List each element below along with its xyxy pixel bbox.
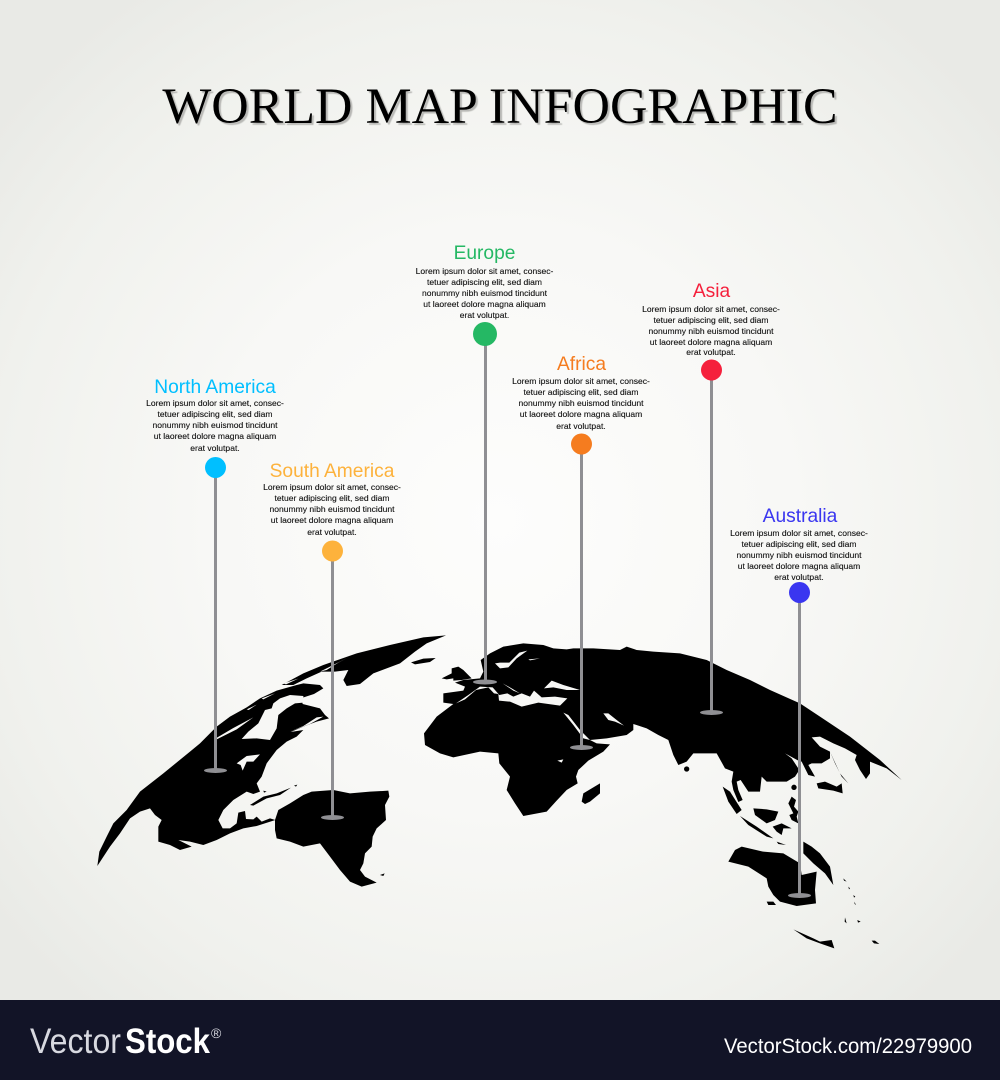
text block: North America: ut laoreet dolore magna aliquam bbox=[154, 431, 276, 441]
text block: Australia: ut laoreet dolore magna aliquam bbox=[738, 561, 860, 571]
text block: Europe: nonummy nibh euismod tincidunt bbox=[422, 288, 548, 298]
Lake Victoria bbox=[557, 759, 563, 763]
logo: VectorStock: ® bbox=[211, 1025, 222, 1041]
Great Lakes bbox=[237, 754, 260, 771]
heading: Europe: Europe bbox=[454, 243, 515, 264]
Sri Lanka bbox=[684, 766, 689, 772]
Gulf of St Lawrence bbox=[290, 717, 323, 732]
small Pacific islands bbox=[843, 878, 879, 944]
panel: South America bbox=[263, 461, 401, 820]
Philippines bbox=[788, 797, 798, 823]
Borneo bbox=[753, 808, 778, 823]
pin: Australia bbox=[788, 582, 811, 898]
text block: Europe: tetuer adipiscing elit, sed diam bbox=[427, 277, 542, 287]
text block: South America: Lorem ipsum dolor sit amet, consec- bbox=[263, 482, 401, 492]
South America bbox=[275, 790, 389, 887]
Greenland bbox=[282, 635, 446, 686]
New Zealand bbox=[793, 929, 834, 948]
text block: South America: ut laoreet dolore magna aliquam bbox=[271, 515, 393, 525]
Eurasia and Africa bbox=[424, 643, 902, 816]
Adriatic bbox=[503, 683, 520, 693]
North America and Arctic bbox=[97, 683, 329, 866]
pin: Asia bbox=[700, 360, 723, 715]
pin: Africa bbox=[570, 434, 593, 750]
title: WORLD MAP INFOGRAPHIC bbox=[162, 79, 838, 135]
text block: Asia: nonummy nibh euismod tincidunt bbox=[649, 326, 774, 336]
heading: South America: South America bbox=[270, 461, 395, 482]
image id: VectorStock.com/22979900 bbox=[724, 1035, 972, 1058]
text block: Australia: erat volutpat. bbox=[774, 572, 824, 582]
Madagascar bbox=[582, 783, 600, 804]
text block: South America: nonummy nibh euismod tincidunt bbox=[270, 504, 395, 514]
heading: North America: North America bbox=[154, 377, 276, 398]
Japan bbox=[817, 782, 843, 793]
Sakhalin bbox=[830, 752, 848, 783]
Hudson Bay bbox=[242, 695, 303, 740]
Great Britain and Ireland bbox=[442, 667, 472, 681]
logo: VectorStock bbox=[30, 1022, 222, 1061]
text block: South America: tetuer adipiscing elit, sed diam bbox=[275, 493, 389, 503]
Tasmania bbox=[767, 902, 776, 905]
map: bays of the Americas bbox=[214, 657, 348, 771]
heading: Asia: Asia bbox=[693, 281, 730, 302]
Iceland bbox=[411, 658, 436, 664]
logo: VectorStock: Stock bbox=[125, 1022, 210, 1061]
heading: Africa: Africa bbox=[557, 354, 606, 375]
Baltic bbox=[495, 651, 527, 668]
Persian Gulf bbox=[603, 713, 624, 726]
map: Americas bbox=[97, 635, 446, 887]
panel: Europe bbox=[416, 243, 554, 684]
footer bar bbox=[0, 1000, 1000, 1080]
text block: Africa: ut laoreet dolore magna aliquam bbox=[520, 409, 642, 419]
pin: North America bbox=[204, 457, 227, 773]
world map bbox=[97, 635, 902, 948]
text block: Europe: erat volutpat. bbox=[460, 310, 509, 320]
Mediterranean bbox=[456, 687, 567, 707]
text block: Asia: erat volutpat. bbox=[686, 347, 736, 357]
panel: Asia bbox=[642, 281, 780, 715]
text block: Asia: tetuer adipiscing elit, sed diam bbox=[654, 315, 768, 325]
text block: Europe: Lorem ipsum dolor sit amet, consec- bbox=[416, 266, 554, 276]
text block: Australia: tetuer adipiscing elit, sed diam bbox=[742, 539, 856, 549]
panel: North America bbox=[146, 377, 284, 773]
text block: South America: erat volutpat. bbox=[307, 527, 357, 537]
panel: Australia bbox=[730, 506, 868, 898]
text block: Africa: nonummy nibh euismod tincidunt bbox=[519, 398, 644, 408]
pin: South America bbox=[321, 540, 344, 820]
Sumatra bbox=[723, 787, 742, 814]
panel: Africa bbox=[512, 354, 650, 750]
Taiwan bbox=[791, 785, 797, 790]
Arctic channels bbox=[214, 717, 253, 739]
text block: North America: erat volutpat. bbox=[190, 443, 240, 453]
text block: Africa: Lorem ipsum dolor sit amet, consec- bbox=[512, 376, 650, 386]
map: Eurasia, Africa and Oceania bbox=[424, 643, 902, 948]
logo: VectorStock: Vector bbox=[30, 1022, 121, 1061]
Australia bbox=[728, 847, 817, 906]
map: inland seas of Eurasia and Africa bbox=[456, 651, 624, 763]
Black Sea bbox=[544, 681, 580, 690]
text block: Australia: Lorem ipsum dolor sit amet, consec- bbox=[730, 528, 868, 538]
text block: Asia: ut laoreet dolore magna aliquam bbox=[650, 337, 772, 347]
Sulawesi bbox=[773, 823, 792, 835]
text block: Australia: nonummy nibh euismod tincidunt bbox=[737, 550, 862, 560]
heading: Australia: Australia bbox=[763, 506, 838, 527]
text block: North America: Lorem ipsum dolor sit amet, consec- bbox=[146, 398, 284, 408]
Red Sea bbox=[563, 713, 590, 740]
text block: Asia: Lorem ipsum dolor sit amet, consec- bbox=[642, 304, 780, 314]
New Guinea bbox=[803, 842, 833, 885]
Java and lesser islands bbox=[740, 816, 786, 845]
text block: North America: tetuer adipiscing elit, sed diam bbox=[158, 409, 272, 419]
text block: Europe: ut laoreet dolore magna aliquam bbox=[423, 299, 546, 309]
Caribbean islands bbox=[250, 785, 297, 806]
pin: Europe bbox=[473, 322, 497, 684]
text block: Africa: erat volutpat. bbox=[556, 421, 606, 431]
text block: North America: nonummy nibh euismod tincidunt bbox=[153, 420, 278, 430]
text block: Africa: tetuer adipiscing elit, sed diam bbox=[524, 387, 638, 397]
